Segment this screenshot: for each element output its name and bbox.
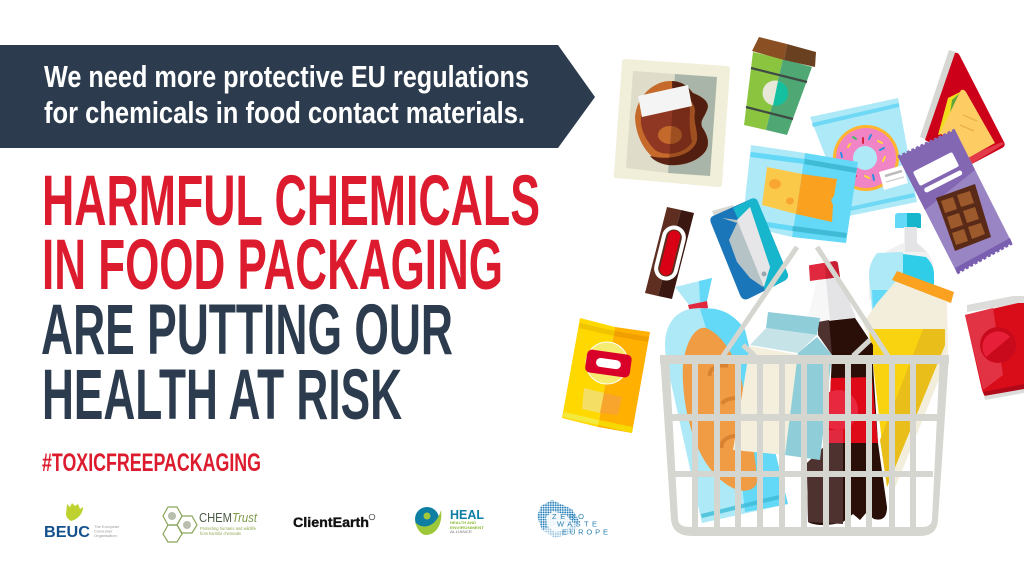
- title: headline: ARE PUTTING OUR: [41, 291, 453, 370]
- illustration: tuna can: [710, 198, 788, 299]
- logo: Zero Waste Europe: [537, 500, 608, 538]
- illustration: red can: [965, 296, 1024, 400]
- logo: CHEM Trust: CHEM: [199, 510, 232, 525]
- logo: BEUC: [44, 503, 119, 541]
- illustration: donut bag: [810, 98, 917, 216]
- logo: CHEM Trust: Protecting humans and wildlife: [200, 526, 256, 531]
- logo: Zero Waste Europe: WASTE: [557, 520, 597, 528]
- hashtag: #TOXICFREEPACKAGING: [42, 449, 261, 477]
- illustration: sandwich pack: [920, 50, 1005, 165]
- illustration: bread bag: [665, 278, 788, 523]
- logo: Zero Waste Europe: ZERO: [552, 512, 584, 521]
- logo: ClientEarth: ClientEarth: [293, 514, 369, 530]
- illustration: chocolate bar: [898, 130, 1012, 273]
- illustration: cheese bag: [745, 145, 858, 243]
- banner: call for EU regulation: [0, 45, 595, 148]
- title: headline: HEALTH AT RISK: [42, 356, 402, 435]
- illustration: milk carton: [733, 312, 832, 460]
- logo: HEAL: HEALTH AND: [450, 520, 476, 525]
- logo: Zero Waste Europe: EUROPE: [562, 528, 608, 536]
- logo: HEAL: HEAL: [450, 507, 484, 522]
- title: headline: HARMFUL CHEMICALS: [42, 162, 540, 241]
- illustration: water bottle: [869, 213, 934, 312]
- illustration: cola bottle: [807, 261, 887, 525]
- illustration: meat tray: [614, 59, 730, 187]
- illustration: crisps packet: [562, 318, 650, 433]
- logo: CHEM Trust: [163, 507, 258, 542]
- illustration: shopping basket: [660, 247, 949, 536]
- logo: HEAL: ENVIRONMENT: [450, 525, 485, 530]
- illustration: candy bar: [645, 207, 694, 299]
- title: headline: IN FOOD PACKAGING: [42, 226, 503, 305]
- banner: call for EU regulation: for chemicals in food contact materials.: [44, 95, 525, 130]
- logo: CHEM Trust: Trust: [232, 510, 258, 525]
- logo: HEAL: ALLIANCE: [450, 529, 472, 534]
- title: headline: [41, 162, 540, 435]
- logo: BEUC: Organisation: [94, 533, 117, 538]
- logo: BEUC: The European: [94, 524, 119, 529]
- logo: BEUC: Consumer: [94, 528, 113, 534]
- banner: call for EU regulation: We need more protective EU regulations: [44, 59, 529, 94]
- logo: CHEM Trust: from harmful chemicals: [200, 531, 242, 536]
- logo: BEUC: BEUC: [44, 524, 90, 541]
- illustration: juice jug: [863, 271, 954, 493]
- illustration: coffee cup: [744, 37, 816, 135]
- logo: HEAL: [415, 507, 485, 535]
